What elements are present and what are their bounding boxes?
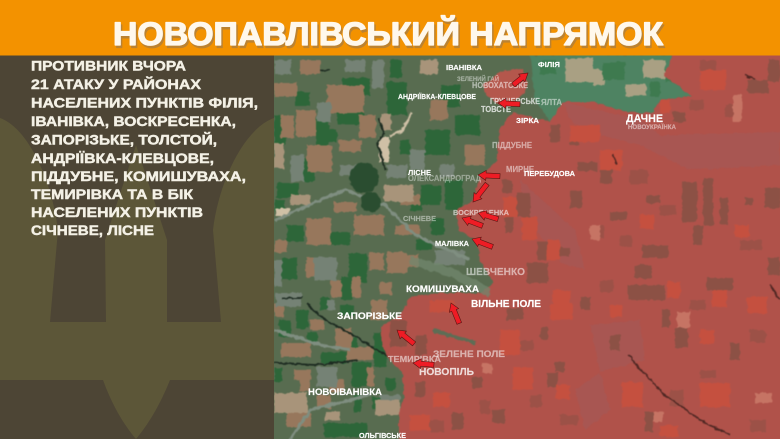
text block: attacks summary: НАСЕЛЕНИХ ПУНКТІВ ФІЛІЯ, <box>31 96 258 110</box>
place labels: ЗЕЛЕНЕ ПОЛЕ <box>433 349 505 360</box>
text block: attacks summary: АНДРІЇВКА-КЛЕВЦОВЕ, <box>31 151 214 166</box>
header band <box>0 0 780 56</box>
place labels: ПІДДУБНЕ <box>492 141 533 150</box>
place labels: ЗІРКА <box>516 116 540 125</box>
trident emblem <box>0 118 274 439</box>
text block: attacks summary: ПРОТИВНИК ВЧОРА <box>31 58 186 74</box>
place labels: ПЕРЕБУДОВА <box>524 169 576 178</box>
place labels: НОВОУКРАЇНКА <box>628 124 677 131</box>
text block: attacks summary <box>31 58 258 238</box>
title: НОВОПАВЛІВСЬКИЙ НАПРЯМОК <box>113 16 663 52</box>
map imagery: red occupied territory <box>380 50 780 439</box>
place labels: ЯЛТА <box>541 98 562 107</box>
map imagery: river band through the line of contact <box>410 260 490 293</box>
place labels: ЛІСНЕ <box>408 168 431 177</box>
text block: attacks summary: ПІДДУБНЕ, КОМИШУВАХА, <box>31 169 246 184</box>
place labels: ШЕВЧЕНКО <box>466 266 525 278</box>
map imagery: green controlled territory <box>274 50 780 439</box>
map imagery: uncoloured fields north-east <box>530 55 692 122</box>
text block: attacks summary: ЗАПОРІЗЬКЕ, ТОЛСТОЙ, <box>31 132 217 148</box>
place labels: МИРНЕ <box>506 165 535 174</box>
text block: attacks summary: НАСЕЛЕНИХ ПУНКТІВ <box>31 205 203 220</box>
place labels: СІЧНЕВЕ <box>403 214 436 223</box>
panel: left text panel with trident <box>0 55 274 439</box>
title: НОВОПАВЛІВСЬКИЙ НАПРЯМОК <box>114 18 665 54</box>
place labels: МАЛІВКА <box>435 241 469 248</box>
place labels <box>308 60 677 439</box>
place labels: ЗАПОРІЗЬКЕ <box>337 311 402 322</box>
place labels: ГРУЩЕВСЬКЕ <box>490 97 541 106</box>
place labels: ТЕМИРІВКА <box>388 354 441 364</box>
text block: attacks summary: СІЧНЕВЕ, ЛІСНЕ <box>31 223 154 238</box>
place labels: ОЛЕКСАНДРОГРАД <box>408 174 481 183</box>
place labels: НОВОПІЛЬ <box>419 367 474 378</box>
text block: attacks summary: 21 АТАКУ У РАЙОНАХ <box>31 77 201 92</box>
text block: attacks summary: ІВАНІВКА, ВОСКРЕСЕНКА, <box>31 114 236 129</box>
place labels: НОВОІВАНІВКА <box>308 387 382 398</box>
place labels: ВОСКРЕСЕНКА <box>453 208 510 217</box>
panel: satellite map <box>274 50 780 439</box>
place labels: ТОВСТЕ <box>481 105 512 114</box>
map imagery: forest patches <box>349 163 381 212</box>
place labels: ФІЛІЯ <box>538 60 560 69</box>
arrows: enemy attack directions <box>394 69 531 370</box>
place labels: ІВАНІВКА <box>446 63 483 72</box>
map base <box>274 55 780 439</box>
place labels: ДАЧНЕ <box>626 113 663 125</box>
place labels: КОМИШУВАХА <box>406 284 479 295</box>
place labels: НОВОХАТСЬКЕ <box>472 81 529 90</box>
place labels: ЗЕЛЕНИЙ ГАЙ <box>457 74 499 83</box>
text block: attacks summary: ТЕМИРІВКА ТА В БІК <box>31 187 194 202</box>
place labels: АНДРІЇВКА-КЛЕВЦОВЕ <box>398 93 476 101</box>
place labels: ВІЛЬНЕ ПОЛЕ <box>471 299 541 310</box>
